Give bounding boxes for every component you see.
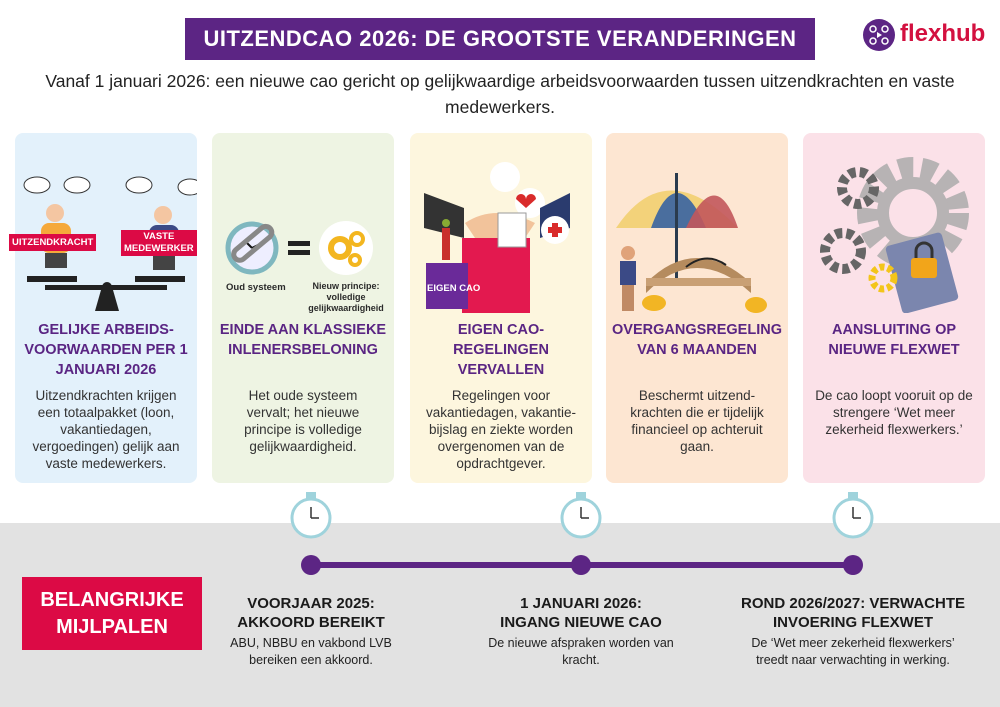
panel: overgangsregeling — [606, 133, 788, 483]
illustration: gears and locked book — [820, 157, 969, 313]
milestone 2: kracht. — [562, 653, 600, 667]
panel: eigen cao-regelingen — [410, 133, 592, 483]
illustration: scale with workers — [24, 176, 197, 311]
panel: einde inlenersbeloning: Oud systeem — [226, 282, 286, 293]
heading: VERVALLEN — [458, 362, 544, 378]
panel: gelijke arbeidsvoorwaarden: VASTE — [143, 231, 174, 242]
heading: EINDE AAN KLASSIEKE — [220, 322, 386, 338]
milestone 3: INVOERING FLEXWET — [773, 614, 933, 631]
heading — [220, 322, 386, 358]
panel: gelijke arbeidsvoorwaarden: MEDEWERKER — [124, 243, 194, 254]
heading — [453, 322, 549, 378]
panel: einde inlenersbeloning — [212, 133, 394, 483]
milestone 2 — [488, 595, 674, 667]
milestone 1 — [230, 595, 392, 667]
label: belangrijke mijlpalen: MIJLPALEN — [56, 616, 168, 638]
panel: eigen cao-regelingen: EIGEN CAO — [427, 283, 480, 294]
milestone 2: INGANG NIEUWE CAO — [500, 614, 662, 631]
text: Beschermt uitzend-krachten die er tijdelijk financieel op achteruit gaan. — [630, 388, 764, 454]
title bar — [185, 18, 815, 60]
heading: NIEUWE FLEXWET — [828, 342, 960, 358]
timeline — [290, 492, 874, 575]
heading — [24, 322, 188, 378]
title bar: UITZENDCAO 2026: DE GROOTSTE VERANDERINGEN — [203, 26, 797, 51]
subtitle: Vanaf 1 januari 2026: een nieuwe cao gericht op gelijkwaardige arbeidsvoorwaarden tussen uitzendkrachten en vaste medewerkers. — [45, 71, 955, 117]
heading: REGELINGEN — [453, 342, 549, 358]
milestone 1: AKKOORD BEREIKT — [237, 614, 385, 631]
panel: gelijke arbeidsvoorwaarden: UITZENDKRACHT — [12, 237, 93, 248]
heading: VOORWAARDEN PER 1 — [24, 342, 188, 358]
milestone 1: VOORJAAR 2025: — [247, 595, 375, 612]
text: De cao loopt vooruit op de strengere ‘Wet meer zekerheid flexwerkers.’ — [815, 388, 973, 437]
logo: flexhub — [863, 19, 985, 51]
panel: aansluiting flexwet — [803, 133, 985, 483]
label: belangrijke mijlpalen: BELANGRIJKE — [40, 589, 184, 611]
illustration: handshake and boxes — [424, 162, 570, 313]
heading — [612, 322, 782, 358]
heading: INLENERSBELONING — [228, 342, 378, 358]
panel: einde inlenersbeloning: Nieuw principe: volledige gelijkwaardigheid — [308, 281, 384, 313]
milestone 2: 1 JANUARI 2026: — [520, 595, 642, 612]
illustration: clock chain equals gears — [226, 221, 373, 275]
text: Uitzendkrachten krijgen een totaalpakket (loon, vakantiedagen, vergoedingen) gelijk aan vaste medewerkers. — [32, 388, 180, 471]
milestone band background — [0, 523, 1000, 707]
heading: VAN 6 MAANDEN — [637, 342, 757, 358]
logo: flexhub: flexhub — [900, 20, 985, 47]
heading — [828, 322, 960, 358]
milestone 1: bereiken een akkoord. — [249, 653, 373, 667]
illustration: umbrella and bridge — [616, 173, 767, 313]
milestone 1: ABU, NBBU en vakbond LVB — [230, 636, 392, 650]
milestone 3: treedt naar verwachting in werking. — [756, 653, 950, 667]
heading: OVERGANGSREGELING — [612, 322, 782, 338]
text: Het oude systeem vervalt; het nieuwe principe is volledige gelijkwaardigheid. — [244, 388, 362, 454]
heading: JANUARI 2026 — [56, 362, 156, 378]
milestone 3: De ‘Wet meer zekerheid flexwerkers’ — [751, 636, 955, 650]
label: belangrijke mijlpalen — [22, 577, 202, 650]
panel: gelijke arbeidsvoorwaarden — [15, 133, 197, 483]
heading: EIGEN CAO- — [458, 322, 544, 338]
milestone 3: ROND 2026/2027: VERWACHTE — [741, 595, 965, 612]
milestone 2: De nieuwe afspraken worden van — [488, 636, 674, 650]
heading: AANSLUITING OP — [832, 322, 956, 338]
text: Regelingen voor vakantiedagen, vakantie-bijslag en ziekte worden overgenomen van de opdrachtgever. — [426, 388, 576, 471]
heading: GELIJKE ARBEIDS- — [38, 322, 174, 338]
milestone 3 — [741, 595, 965, 667]
